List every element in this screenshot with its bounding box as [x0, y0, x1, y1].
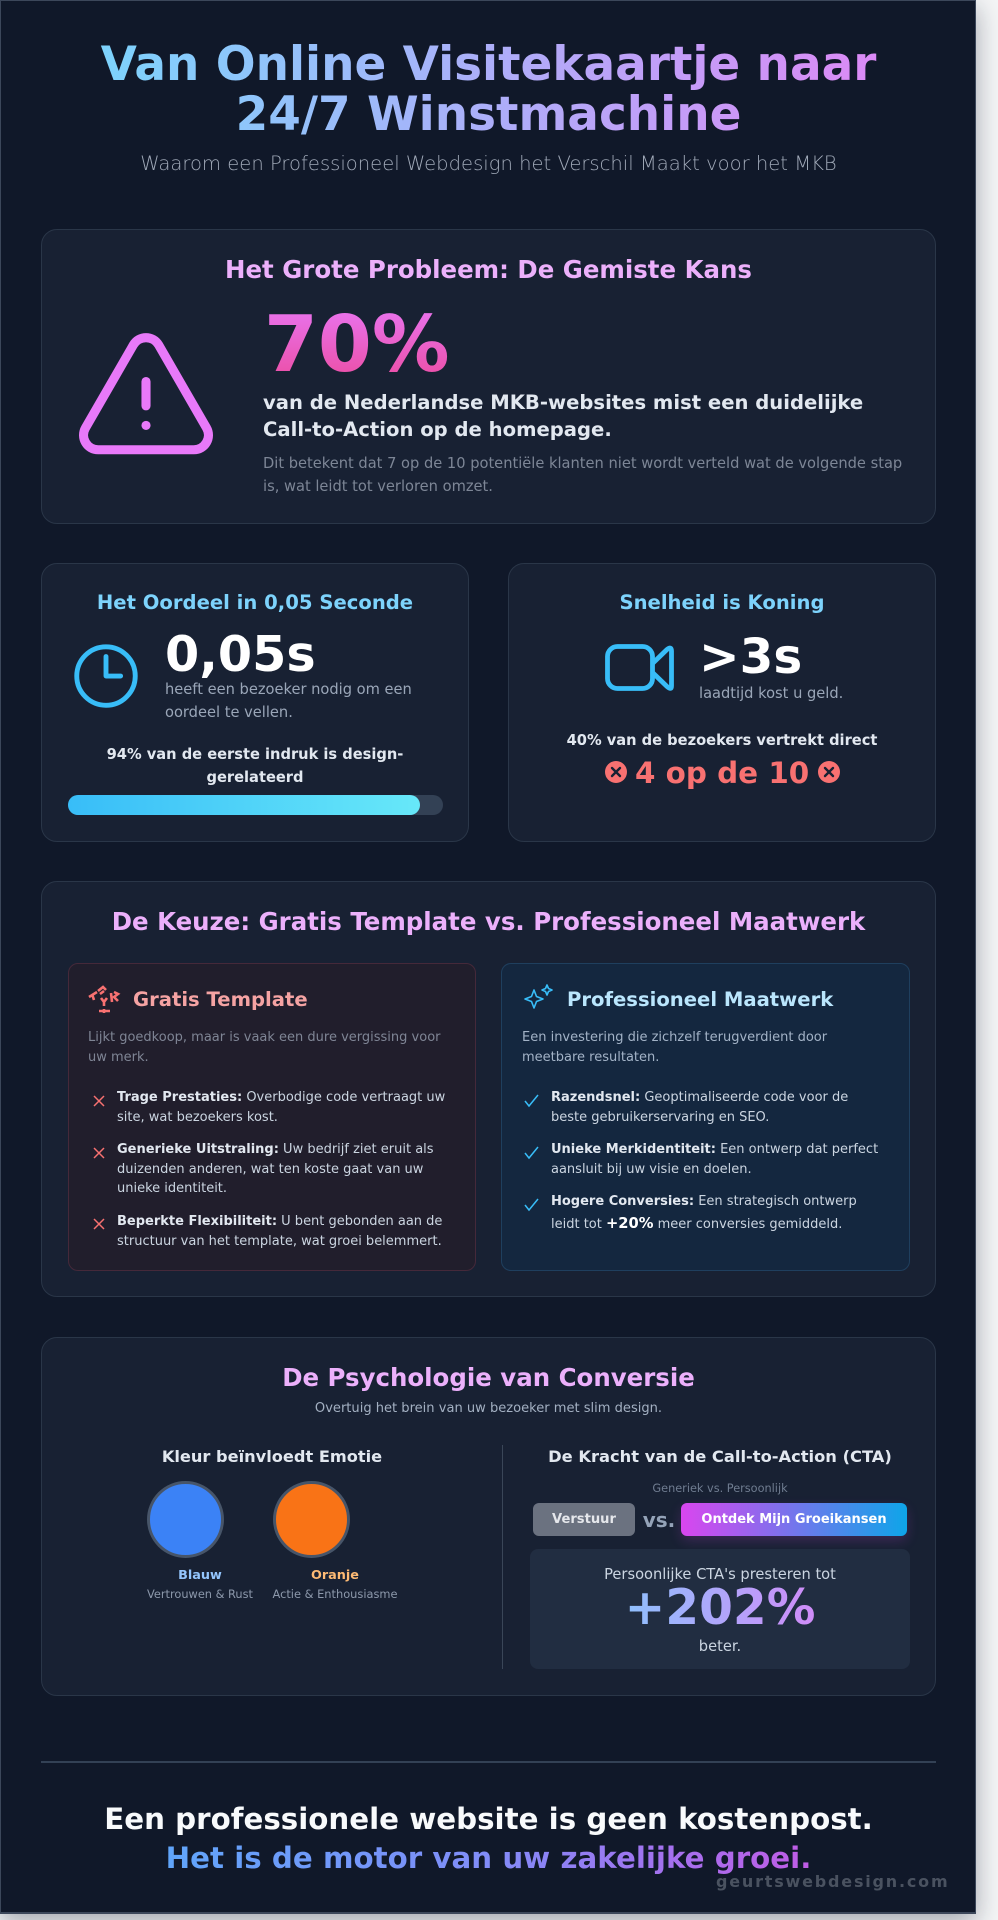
heading: kleur: Kleur beïnvloedt Emotie — [162, 1447, 382, 1466]
highlight text: 4 op de 10: 4 op de 10 — [635, 756, 809, 790]
description — [88, 1030, 440, 1065]
icon: check 3 — [524, 1198, 538, 1212]
stat text: 94% — [107, 746, 403, 786]
statement text: Call-to-Action op de homepage. — [263, 418, 612, 441]
explanation text — [263, 455, 902, 495]
button: ontdek — [681, 1503, 907, 1536]
heading: de keuze: De Keuze: Gratis Template vs. Professioneel Maatwerk — [112, 907, 865, 936]
stat text: 40%: 40% van de bezoekers vertrekt direct — [567, 732, 877, 749]
list item 2: Generieke Uitstraling: Uw bedrijf ziet eruit als — [117, 1142, 434, 1157]
title: 24/7 Winstmachine — [236, 87, 741, 142]
icon: check 1 — [524, 1094, 538, 1108]
label: blauw: Blauw — [178, 1568, 222, 1583]
clock text: heeft een bezoeker nodig om een — [165, 681, 412, 698]
stat box — [530, 1549, 910, 1669]
list item 1: site, wat bezoekers kost. — [117, 1110, 278, 1125]
description: uw merk. — [88, 1050, 149, 1065]
list item 2: unieke identiteit. — [117, 1181, 227, 1196]
panel: de keuze — [41, 881, 936, 1297]
text: vs: vs. — [643, 1508, 675, 1532]
list item 1: Razendsnel: Geoptimaliseerde code voor de — [551, 1090, 848, 1105]
big number: 0,05s: 0,05s — [165, 625, 316, 683]
panel: snelheid — [508, 563, 936, 842]
clock text — [165, 681, 412, 721]
list item 3 — [117, 1214, 442, 1249]
icon: video camera — [605, 644, 674, 691]
heading: gratis template: Gratis Template — [133, 988, 308, 1011]
icon: warning triangle — [79, 333, 213, 454]
speed text: laadtijd kost u geld. — [699, 685, 843, 702]
stat text: Persoonlijke CTA's presteren tot — [604, 1566, 836, 1583]
panel: gratis template — [68, 963, 476, 1271]
big number: 70%: 70% — [264, 300, 450, 390]
heading: psychologie: De Psychologie van Conversie — [282, 1363, 695, 1392]
caption: oranje: Actie & Enthousiasme — [272, 1587, 398, 1601]
list item 1 — [551, 1090, 848, 1125]
label: oranje: Oranje — [311, 1568, 359, 1583]
watermark: geurtswebdesign.com — [716, 1872, 949, 1891]
description: Een investering die zichzelf terugverdient door — [522, 1030, 827, 1045]
heading: kracht cta: De Kracht van de Call-to-Action (CTA) — [548, 1447, 892, 1466]
list item 1: beste gebruikerservaring en SEO. — [551, 1110, 769, 1125]
color circle: blauw — [147, 1481, 224, 1558]
vertical divider — [502, 1445, 503, 1669]
list item 2 — [117, 1142, 434, 1196]
icon: x circle left — [605, 761, 627, 783]
heading: professioneel maatwerk: Professioneel Maatwerk — [567, 988, 833, 1011]
button: ontdek: Ontdek Mijn Groeikansen — [701, 1512, 887, 1527]
progress bar — [68, 795, 443, 815]
list item 3 — [551, 1194, 857, 1232]
list item 3: structuur van het template, wat groei belemmert. — [117, 1234, 442, 1249]
stat text: 94%: gerelateerd — [206, 769, 304, 786]
clock text: oordeel te vellen. — [165, 704, 293, 721]
subtitle: Waarom een Professioneel Webdesign het Verschil Maakt voor het MKB — [140, 152, 837, 175]
subheading: Overtuig het brein van uw bezoeker met slim design. — [315, 1401, 662, 1416]
description: meetbare resultaten. — [522, 1050, 659, 1065]
explanation text: is, wat leidt tot verloren omzet. — [263, 478, 493, 495]
title — [100, 40, 877, 140]
panel: professioneel maatwerk — [501, 963, 910, 1271]
icon: cross 2 — [94, 1148, 104, 1158]
big number: >3s: >3s — [699, 629, 802, 685]
list item 3: leidt tot +20% meer conversies gemiddeld. — [551, 1215, 842, 1232]
footer divider — [41, 1761, 936, 1763]
caption: blauw: Vertrouwen & Rust — [147, 1587, 253, 1601]
caption: generiek vs persoonlijk: Generiek vs. Persoonlijk — [652, 1482, 788, 1495]
title: Van Online Visitekaartje naar — [101, 37, 876, 92]
description — [522, 1030, 828, 1065]
icon: clock — [74, 644, 138, 708]
heading: snelheid: Snelheid is Koning — [619, 591, 824, 614]
footer line 1: Een professionele website is geen kostenpost. — [104, 1802, 873, 1836]
statement text — [263, 391, 863, 441]
icon: broken shape — [88, 985, 120, 1013]
list item 3: Beperkte Flexibiliteit: U bent gebonden aan de — [117, 1214, 442, 1229]
stat text: 94%: 94% van de eerste indruk is design- — [107, 746, 403, 763]
button: verstuur: Verstuur — [552, 1512, 616, 1527]
stat text: beter: beter. — [699, 1638, 741, 1655]
panel: het oordeel — [41, 563, 469, 842]
icon: x circle right — [818, 761, 840, 783]
list item 2: aansluit bij uw visie en doelen. — [551, 1162, 752, 1177]
big number: +202%: +202% — [625, 1580, 815, 1636]
heading: het grote probleem: Het Grote Probleem: De Gemiste Kans — [225, 255, 752, 284]
color circle: oranje — [273, 1481, 350, 1558]
list item 3: Hogere Conversies: Een strategisch ontwerp — [551, 1194, 857, 1209]
statement text: van de Nederlandse MKB-websites mist een duidelijke — [263, 391, 863, 414]
heading: het oordeel: Het Oordeel in 0,05 Seconde — [97, 591, 413, 614]
list item 2: Unieke Merkidentiteit: Een ontwerp dat perfect — [551, 1142, 878, 1157]
icon: cross 1 — [94, 1096, 104, 1106]
button: verstuur — [533, 1503, 635, 1536]
progress fill — [68, 795, 420, 815]
icon: sparkles — [524, 984, 553, 1009]
panel: psychologie — [41, 1337, 936, 1696]
explanation text: Dit betekent dat 7 op de 10 potentiële klanten niet wordt verteld wat de volgende stap — [263, 455, 902, 472]
list item 1: Trage Prestaties: Overbodige code vertraagt uw — [117, 1090, 445, 1105]
list item 2: duizenden anderen, wat ten koste gaat van uw — [117, 1162, 423, 1177]
icon: cross 3 — [94, 1218, 104, 1230]
description: Lijkt goedkoop, maar is vaak een dure vergissing voor — [88, 1030, 440, 1045]
list item 2 — [551, 1142, 878, 1177]
icon: check 2 — [524, 1146, 538, 1160]
list item 1 — [117, 1090, 445, 1125]
footer line 2: Het is de motor van uw zakelijke groei. — [166, 1841, 811, 1875]
panel: het grote probleem — [41, 229, 936, 524]
